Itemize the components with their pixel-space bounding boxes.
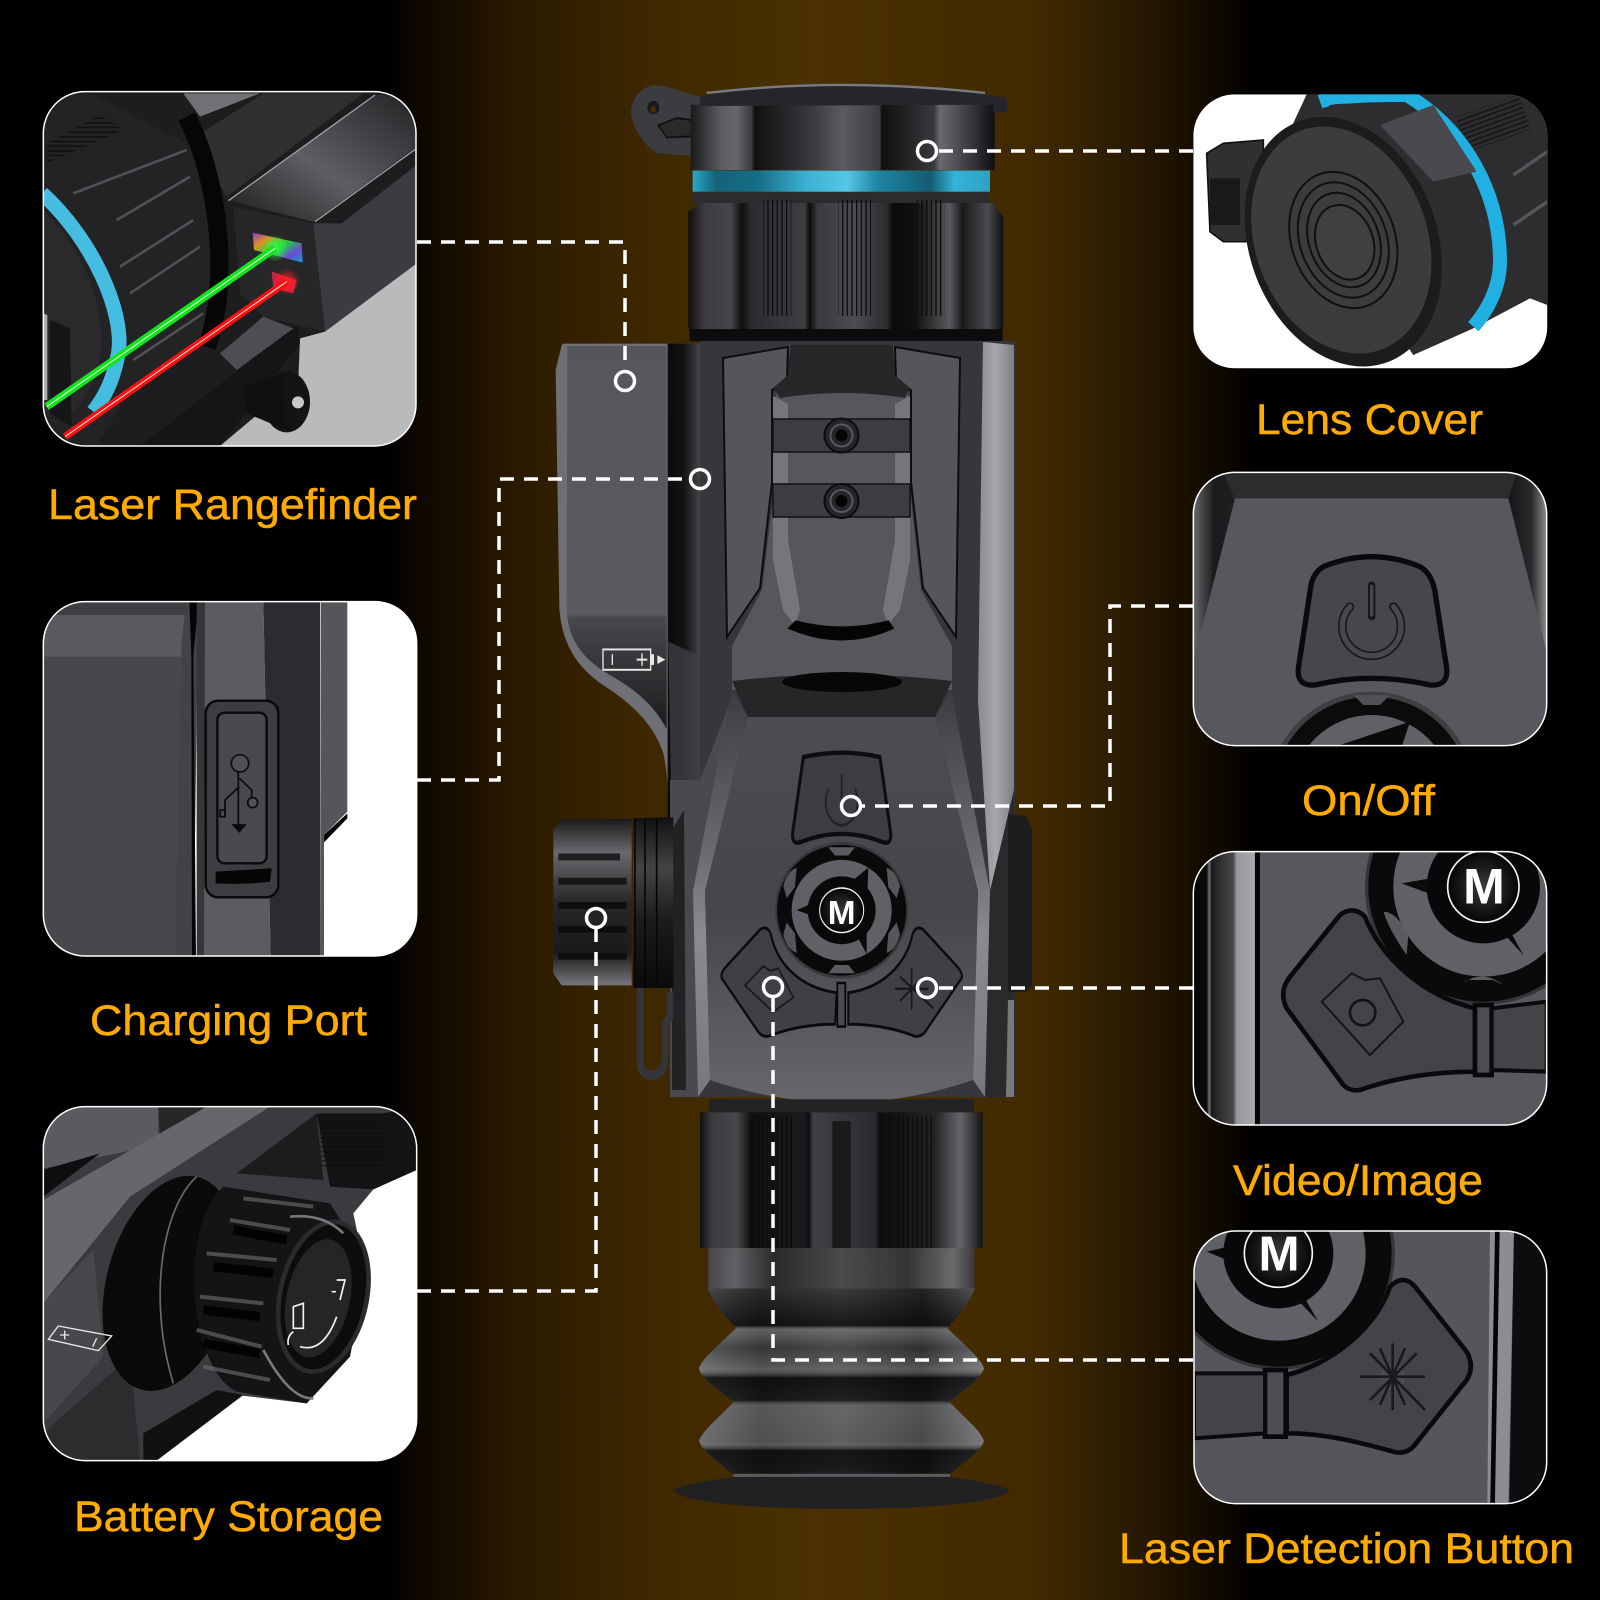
divider [1475,1005,1492,1075]
left camera button [721,928,837,1036]
knurled focus ring [688,200,1003,341]
main body base [670,341,1015,1097]
objective lens assembly [631,84,1007,341]
right side knob [1008,814,1032,992]
callout: battery storage leader [417,908,606,1291]
joystick ring [776,843,907,977]
left side bevel [670,690,735,1097]
body housing [556,341,1015,1102]
blue ring [42,193,119,412]
heading: Video/Image: Video/Image [1233,1157,1483,1205]
M label: M [828,895,856,932]
callout: charging port leader [417,470,710,780]
callout: laser detection leader [764,978,1193,1360]
power button [793,753,891,843]
rainbow lens [253,233,303,263]
left chamfer strip [693,690,748,1097]
panel: charging port [43,602,417,956]
heading: Laser Detection Button: Laser Detection Button [1119,1525,1574,1573]
mount rail [140,325,300,446]
heading: Lens Cover: Lens Cover [1256,396,1483,444]
right laser button [848,928,962,1036]
callout: laser rangefinder leader [417,242,634,390]
rail bottom curve [790,622,892,639]
dark transition band [732,674,952,717]
panel: laser rangefinder [42,92,417,446]
lens cap body [691,105,995,170]
scope device [553,84,1032,1509]
battery icon [603,649,665,670]
joystick ring [1365,852,1546,1004]
panel: on/off [1192,472,1548,746]
lower control panel [705,717,978,1102]
scope ridged housing [43,93,217,446]
top left plate [723,347,788,637]
hinge tab [1207,140,1263,242]
eyecup brim [673,1472,1009,1509]
lens cap hinge tab [631,85,716,156]
top right plate [895,347,960,637]
right chamfer strip [935,690,990,1097]
battery compartment [556,344,701,836]
blue ring [1320,95,1500,327]
battery icon [48,1326,112,1351]
camera button [1283,910,1475,1090]
knob ridged body [194,1187,363,1403]
knob end face [263,1213,382,1398]
center rail bed [732,345,952,690]
USB cover [206,701,278,897]
panel: video/image [1192,850,1548,1126]
heading: Charging Port: Charging Port [90,997,367,1045]
heading: Laser Rangefinder: Laser Rangefinder [48,481,417,529]
M label: M [1258,1227,1300,1282]
rail mount neck [773,345,910,398]
controls cluster [721,753,962,1036]
sleeve [708,1248,974,1291]
rubber eyecup [697,1288,987,1475]
rail side blocks [773,396,800,625]
usb symbol [220,755,258,832]
right light side strip [978,342,1014,891]
rail crossbar upper [773,418,910,452]
blue ring [693,171,990,192]
knob rear collar [102,1176,219,1391]
red laser beam [65,268,300,437]
power button [1298,557,1447,685]
heading: On/Off: On/Off [1302,777,1436,825]
callout: on/off leader [842,606,1193,816]
callout: lens cover leader [918,142,1193,160]
green laser beam [47,235,288,407]
joystick ring [1194,1232,1395,1370]
joystick ring top [1282,692,1462,745]
lens cap brim [700,84,1007,112]
divider [1265,1370,1286,1437]
mount knob [270,371,310,432]
tether clip [640,988,670,1075]
panel: lens cover [1193,94,1548,368]
callout: video/image leader [918,978,1193,998]
eyepiece focus ring [700,1112,983,1252]
heading: Battery Storage: Battery Storage [74,1493,383,1541]
laser button [1287,1280,1471,1453]
left battery knob [553,817,673,1075]
panel: laser detection button [1193,1230,1548,1504]
button divider [837,983,845,1027]
cap face [1244,117,1442,366]
neck [709,1099,974,1114]
eyepiece assembly [673,1099,1009,1509]
M label: M [1463,859,1505,915]
panel: battery storage [43,1107,417,1461]
rail crossbar lower [773,484,910,518]
